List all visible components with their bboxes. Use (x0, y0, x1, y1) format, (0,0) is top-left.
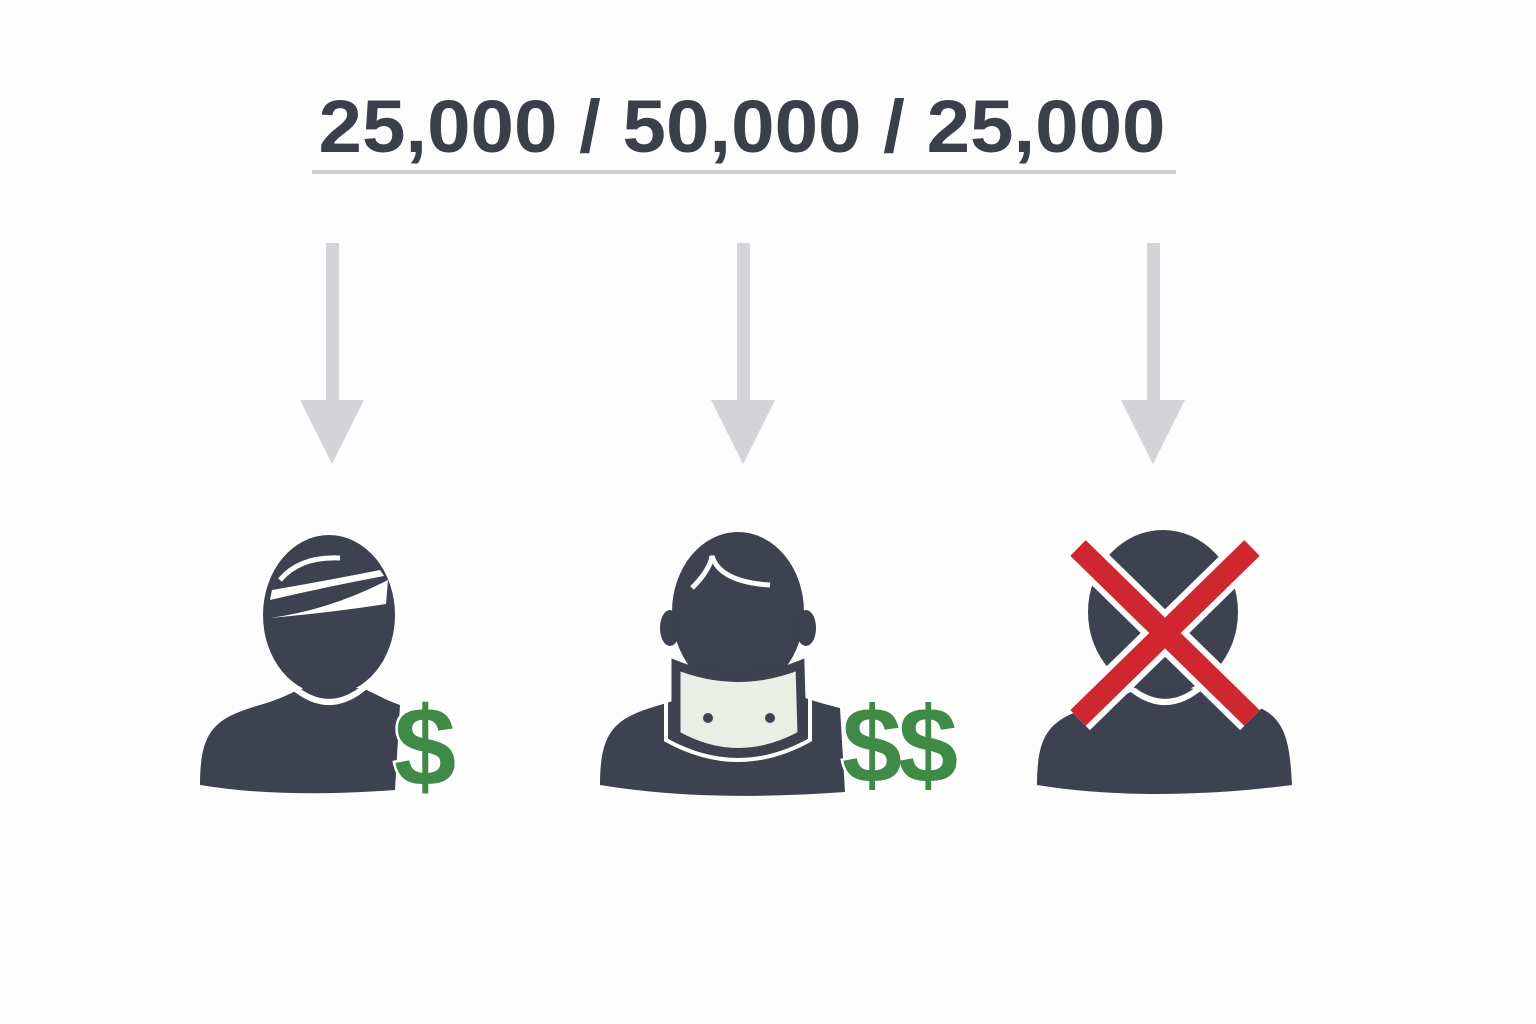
icon: bandaged person with $: $ (394, 684, 456, 809)
arrow: right (1121, 243, 1185, 464)
arrow: left (300, 243, 364, 464)
red X (1078, 548, 1252, 718)
icon: crossed-out person (1037, 530, 1292, 794)
arrow: middle (711, 243, 775, 464)
title: 25,000 / 50,000 / 25,000 (318, 85, 1166, 168)
icon: bandaged person with $ (200, 535, 456, 809)
icon: person with neck brace and $$ (600, 532, 957, 805)
icon: person with neck brace and $$: $$ (842, 684, 957, 805)
